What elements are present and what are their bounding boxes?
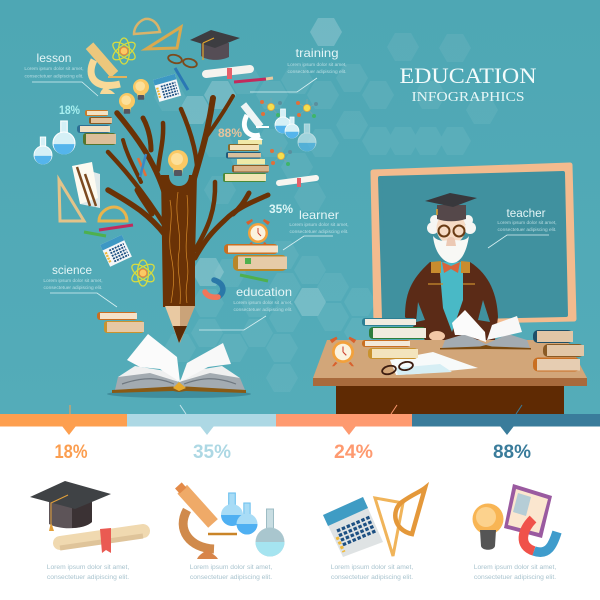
- percent: 18%: 18%: [54, 441, 88, 463]
- hexagon pattern: [154, 33, 498, 392]
- icon: magenta pencil top: [234, 78, 273, 82]
- label: education: education: [236, 285, 292, 299]
- icon: small pencils: [138, 154, 146, 177]
- desk glasses: [381, 361, 414, 376]
- tree percent labels: 18%: [59, 105, 80, 117]
- icon: protractor top: [134, 19, 160, 34]
- percent bars: [0, 405, 600, 435]
- caption: column 1: Lorem ipsum dolor sit amet,: [47, 564, 129, 571]
- label: teacher: [488, 206, 557, 248]
- label: science: [43, 263, 117, 307]
- desk alarm clock: [330, 337, 356, 366]
- icon: protractor left: [99, 207, 127, 221]
- icon: bulbs top: [119, 79, 149, 114]
- caption: column 2: Lorem ipsum dolor sit amet,: [190, 564, 272, 571]
- label: teacher: consectetuer adipiscing elit.: [498, 227, 556, 233]
- label: lesson: lesson: [36, 51, 72, 65]
- icon: magnet: [205, 280, 223, 297]
- teacher figure: [405, 193, 498, 341]
- caption: column 1: [47, 564, 129, 581]
- label: training: Lorem ipsum dolor sit amet,: [287, 62, 347, 68]
- title: INFOGRAPHICS: [412, 89, 524, 104]
- icon: atom top: [110, 38, 138, 64]
- label: training: training: [296, 46, 338, 60]
- label: teacher: teacher: [506, 206, 546, 220]
- caption: column 4: Lorem ipsum dolor sit amet,: [474, 564, 556, 571]
- open book under tree: [107, 334, 251, 398]
- caption: column 2: [190, 564, 272, 581]
- desk books right: [533, 330, 584, 372]
- icon: diploma right: [279, 178, 316, 187]
- icon: books learner: [224, 244, 287, 271]
- desk open book: [440, 310, 531, 350]
- icon: green pencil left: [84, 232, 106, 236]
- label: lesson: consectetuer adipiscing elit.: [25, 74, 83, 80]
- caption: column 4: [474, 564, 556, 581]
- icon: calculator and rulers: [323, 488, 425, 557]
- icon: set square top: [146, 27, 181, 49]
- caption: column 3: Lorem ipsum dolor sit amet,: [331, 564, 413, 571]
- icon: graduation cap and diploma: [30, 481, 143, 553]
- percent: 88%: 88%: [493, 441, 531, 463]
- label: training: consectetuer adipiscing elit.: [288, 69, 346, 75]
- icon: molecules: [260, 98, 318, 166]
- caption: column 3: [331, 564, 413, 581]
- icon: flasks left: [34, 121, 75, 164]
- pencil tree trunk: [161, 175, 197, 343]
- label: science: consectetuer adipiscing elit.: [44, 285, 102, 291]
- label: education: [199, 285, 293, 330]
- desk: [313, 340, 587, 415]
- desk papers: [390, 352, 478, 375]
- icon: set square left: [59, 180, 84, 221]
- icon: white microscope: [241, 102, 269, 140]
- label: education: consectetuer adipiscing elit.: [234, 307, 292, 313]
- percent: 35%: 35%: [193, 441, 231, 463]
- icon: books science: [97, 312, 144, 333]
- icon: calendar left: [100, 235, 132, 267]
- percent: 24%: 24%: [334, 441, 373, 463]
- icon: green pencil right: [240, 275, 268, 281]
- desk books left: [362, 318, 426, 359]
- label: learner: consectetuer adipiscing elit.: [290, 229, 348, 235]
- icon: graduation cap top: [190, 30, 240, 60]
- icon: diploma top: [206, 68, 250, 79]
- icon: paper and brushes: [72, 162, 100, 208]
- tree percent labels: 88%: [218, 128, 242, 140]
- label: learner: [283, 208, 349, 250]
- white lower section: [0, 426, 600, 600]
- label: learner: learner: [299, 208, 339, 222]
- chalkboard: [373, 165, 574, 323]
- icon: microscope top: [86, 42, 127, 94]
- icon: calendar top: [153, 74, 181, 102]
- label: lesson: [24, 51, 98, 96]
- tree percent labels: [59, 105, 293, 216]
- title: [400, 63, 537, 104]
- caption: column 4: consectetuer adipiscing elit.: [474, 574, 556, 581]
- label: teacher: Lorem ipsum dolor sit amet,: [497, 220, 557, 226]
- caption: column 2: consectetuer adipiscing elit.: [190, 574, 272, 581]
- caption: column 1: consectetuer adipiscing elit.: [47, 574, 129, 581]
- label: science: science: [52, 263, 92, 277]
- icon: microscope and flasks: [175, 482, 284, 559]
- icon: books left: [77, 110, 116, 145]
- label: science: Lorem ipsum dolor sit amet,: [43, 278, 103, 284]
- background: [0, 0, 600, 427]
- icon: tree bulb: [168, 150, 188, 176]
- icon: glasses top: [167, 53, 198, 69]
- label: lesson: Lorem ipsum dolor sit amet,: [24, 66, 84, 72]
- title: EDUCATION: [400, 63, 537, 88]
- label: learner: Lorem ipsum dolor sit amet,: [289, 222, 349, 228]
- label: training: [250, 46, 347, 92]
- icon: blue pen: [175, 68, 188, 90]
- icon: magenta pencil left: [99, 225, 133, 230]
- tree branches: [108, 96, 268, 258]
- icon: flasks right: [275, 109, 316, 151]
- caption: column 3: consectetuer adipiscing elit.: [331, 574, 413, 581]
- icon: alarm clock learner: [246, 219, 270, 246]
- icon: bulb, book and magnet: [472, 484, 557, 552]
- tree percent labels: 35%: [269, 204, 293, 216]
- icon: book stack centre: [223, 140, 269, 182]
- icon: atom left: [129, 260, 157, 286]
- label: education: Lorem ipsum dolor sit amet,: [233, 300, 293, 306]
